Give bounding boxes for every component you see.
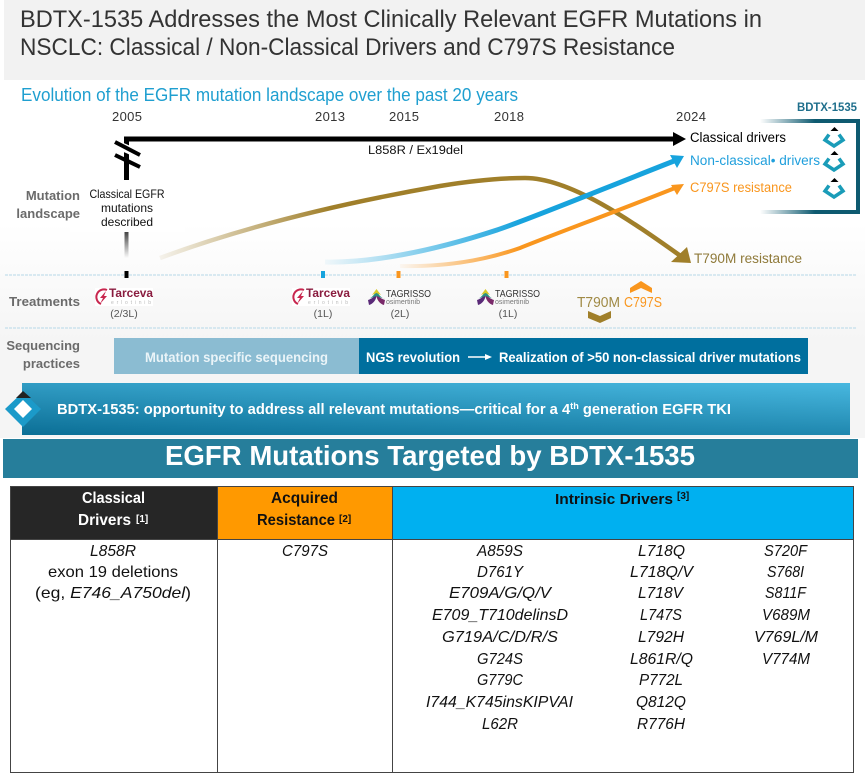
- outcome labels: T790M resistance: [694, 251, 802, 266]
- timeline years: 2018: [494, 109, 524, 124]
- callout: classical EGFR mutations described: mutations: [101, 201, 153, 215]
- row label: mutation landscape: [16, 188, 80, 221]
- header: classical drivers: [11, 487, 217, 539]
- intrinsic drivers column 2: L792H: [638, 629, 684, 646]
- timeline years: [112, 109, 706, 124]
- logo: Tagrisso 2L: (2L): [391, 308, 409, 320]
- callout: classical EGFR mutations described: Classical EGFR: [90, 187, 165, 201]
- intrinsic drivers column 2: L747S: [640, 607, 682, 624]
- banner: BDTX-1535 opportunity: BDTX-1535: opportunity to address all relevant mutations—critical for a 4: [57, 402, 562, 418]
- intrinsic drivers column 3: V769L/M: [754, 629, 819, 646]
- sequencing bar: NGS revolution: [366, 349, 460, 365]
- intrinsic drivers column 2: P772L: [639, 672, 683, 689]
- outcome labels: [690, 130, 820, 266]
- classical drivers list: L858R: [90, 543, 136, 560]
- intrinsic drivers column 3: V774M: [762, 651, 811, 668]
- banner: BDTX-1535 opportunity: th: [570, 401, 579, 411]
- logo: Tarceva 2/3L: (2/3L): [110, 308, 138, 320]
- logo: Tarceva 2/3L: [95, 286, 153, 320]
- banner: BDTX-1535 opportunity: [22, 383, 850, 435]
- logo: Tarceva 2/3L: Tarceva: [109, 286, 153, 300]
- logo: Tagrisso 2L: TAGRISSO: [386, 288, 431, 300]
- sequencing bar: [114, 338, 808, 374]
- sequencing bar: Realization of >50 non-classical driver mutations: [499, 349, 801, 365]
- intrinsic drivers column 1: G779C: [477, 672, 523, 689]
- intrinsic drivers column 1: E709A/G/Q/V: [449, 585, 552, 602]
- intrinsic drivers column 3: S720F: [764, 543, 808, 560]
- intrinsic drivers column 1: G719A/C/D/R/S: [442, 629, 558, 646]
- logo: Tagrisso 1L: TAGRISSO: [495, 288, 540, 300]
- subtitle: Evolution of the EGFR mutation landscape over the past 20 years: [21, 85, 518, 105]
- icon: BDTX diamond, C797S: [825, 178, 843, 197]
- trend: C797S up: C797S: [624, 295, 662, 311]
- callout: classical EGFR mutations described: [70, 180, 185, 258]
- timeline years: 2013: [315, 109, 345, 124]
- logo: Tarceva 1L: erlotinib: [308, 300, 348, 306]
- outcome labels: Non-classical• drivers: [690, 153, 820, 168]
- header: intrinsic drivers: Intrinsic Drivers: [555, 491, 673, 508]
- title band: NSCLC: Classical / Non-Classical Drivers and C797S Resistance: [20, 34, 675, 61]
- black arrow: classical drivers: [112, 132, 686, 180]
- intrinsic drivers column 1: D761Y: [477, 564, 524, 581]
- logo: Tagrisso 2L: [368, 288, 431, 320]
- logo: Tarceva 2/3L: erlotinib: [111, 300, 151, 306]
- intrinsic drivers column 1: E709_T710delinsD: [432, 607, 568, 624]
- table: EGFR mutations: [10, 486, 854, 772]
- header: classical drivers: [1]: [136, 514, 148, 525]
- header: intrinsic drivers: [392, 487, 853, 539]
- logo: Tagrisso 2L: osimertinib: [386, 299, 420, 306]
- callout: classical EGFR mutations described: described: [101, 215, 153, 229]
- header: classical drivers: Drivers: [78, 512, 131, 529]
- timeline years: 2015: [389, 109, 419, 124]
- BDTX-1535 bracket: BDTX-1535: [797, 102, 858, 114]
- title band: [4, 0, 865, 80]
- icon: BDTX diamond, non-classical: [825, 151, 843, 170]
- logo: Tarceva 1L: [292, 286, 350, 320]
- row label: mutation landscape: Mutation: [26, 188, 80, 203]
- intrinsic drivers column 3: S811F: [765, 585, 807, 602]
- row label: sequencing practices: practices: [23, 356, 80, 371]
- logo: Tagrisso 1L: osimertinib: [495, 299, 529, 306]
- label: L858R / Ex19del: L858R / Ex19del: [368, 145, 463, 157]
- intrinsic drivers column 3: V689M: [762, 607, 811, 624]
- intrinsic drivers column 2: L718Q: [638, 543, 685, 560]
- trend: T790M down: [577, 295, 620, 323]
- logo: Tagrisso 1L: (1L): [499, 308, 517, 320]
- section heading band: EGFR Mutations Targeted by BDTX-1535: [165, 440, 695, 471]
- row label: mutation landscape: landscape: [16, 206, 80, 221]
- header: intrinsic drivers: [3]: [677, 491, 689, 502]
- intrinsic drivers column 2: Q812Q: [636, 694, 686, 711]
- intrinsic drivers column 1: G724S: [477, 651, 523, 668]
- gold curve: T790M resistance: [160, 178, 691, 263]
- intrinsic drivers column 2: L718Q/V: [630, 564, 694, 581]
- trend: C797S up: [624, 281, 662, 311]
- intrinsic drivers column 2: R776H: [637, 716, 685, 733]
- row label: sequencing practices: [6, 338, 80, 371]
- intrinsic drivers column 1: L62R: [482, 716, 518, 733]
- header: acquired resistance: [217, 487, 392, 539]
- section heading band: [3, 439, 858, 478]
- timeline ticks: [124, 271, 508, 278]
- intrinsic drivers column 1: I744_K745insKIPVAI: [426, 694, 574, 711]
- icon: banner diamond: [5, 391, 41, 427]
- header: acquired resistance: Resistance: [257, 512, 335, 529]
- header: acquired resistance: Acquired: [271, 490, 338, 507]
- logo: Tarceva 1L: (1L): [314, 308, 332, 320]
- banner: BDTX-1535 opportunity: generation EGFR TKI: [579, 402, 731, 418]
- intrinsic drivers column 2: L861R/Q: [630, 651, 693, 668]
- logo: Tarceva 1L: Tarceva: [306, 286, 350, 300]
- blue arrow: non-classical drivers: [325, 155, 684, 262]
- logo: Tagrisso 1L: [477, 288, 540, 320]
- sequencing bar: Mutation specific sequencing: [145, 349, 328, 365]
- header: classical drivers: Classical: [82, 490, 145, 507]
- classical drivers list: exon 19 deletions: [48, 564, 178, 581]
- intrinsic drivers column 3: S768I: [767, 564, 804, 581]
- intrinsic drivers column 2: L718V: [638, 585, 684, 602]
- intrinsic drivers column 2: [630, 543, 694, 733]
- header: acquired resistance: [2]: [339, 514, 351, 525]
- intrinsic drivers column 1: [426, 543, 574, 733]
- title band: BDTX-1535 Addresses the Most Clinically Relevant EGFR Mutations in: [20, 6, 762, 33]
- intrinsic drivers column 1: A859S: [476, 543, 523, 560]
- classical drivers list: [35, 543, 191, 602]
- BDTX-1535 bracket: [760, 102, 860, 214]
- orange arrow: C797S resistance: [400, 184, 684, 266]
- outcome labels: C797S resistance: [690, 180, 792, 195]
- row label: sequencing practices: Sequencing: [6, 338, 80, 353]
- timeline years: 2024: [676, 109, 706, 124]
- intrinsic drivers column 3: [754, 543, 819, 668]
- outcome labels: Classical drivers: [690, 130, 786, 145]
- icon: BDTX diamond, classical: [825, 127, 843, 146]
- acquired resistance list: C797S: [282, 543, 328, 560]
- row label: treatments: Treatments: [9, 294, 80, 309]
- timeline years: 2005: [112, 109, 142, 124]
- classical drivers list: (eg, E746_A750del ): [35, 585, 191, 602]
- trend: T790M down: T790M: [577, 295, 620, 311]
